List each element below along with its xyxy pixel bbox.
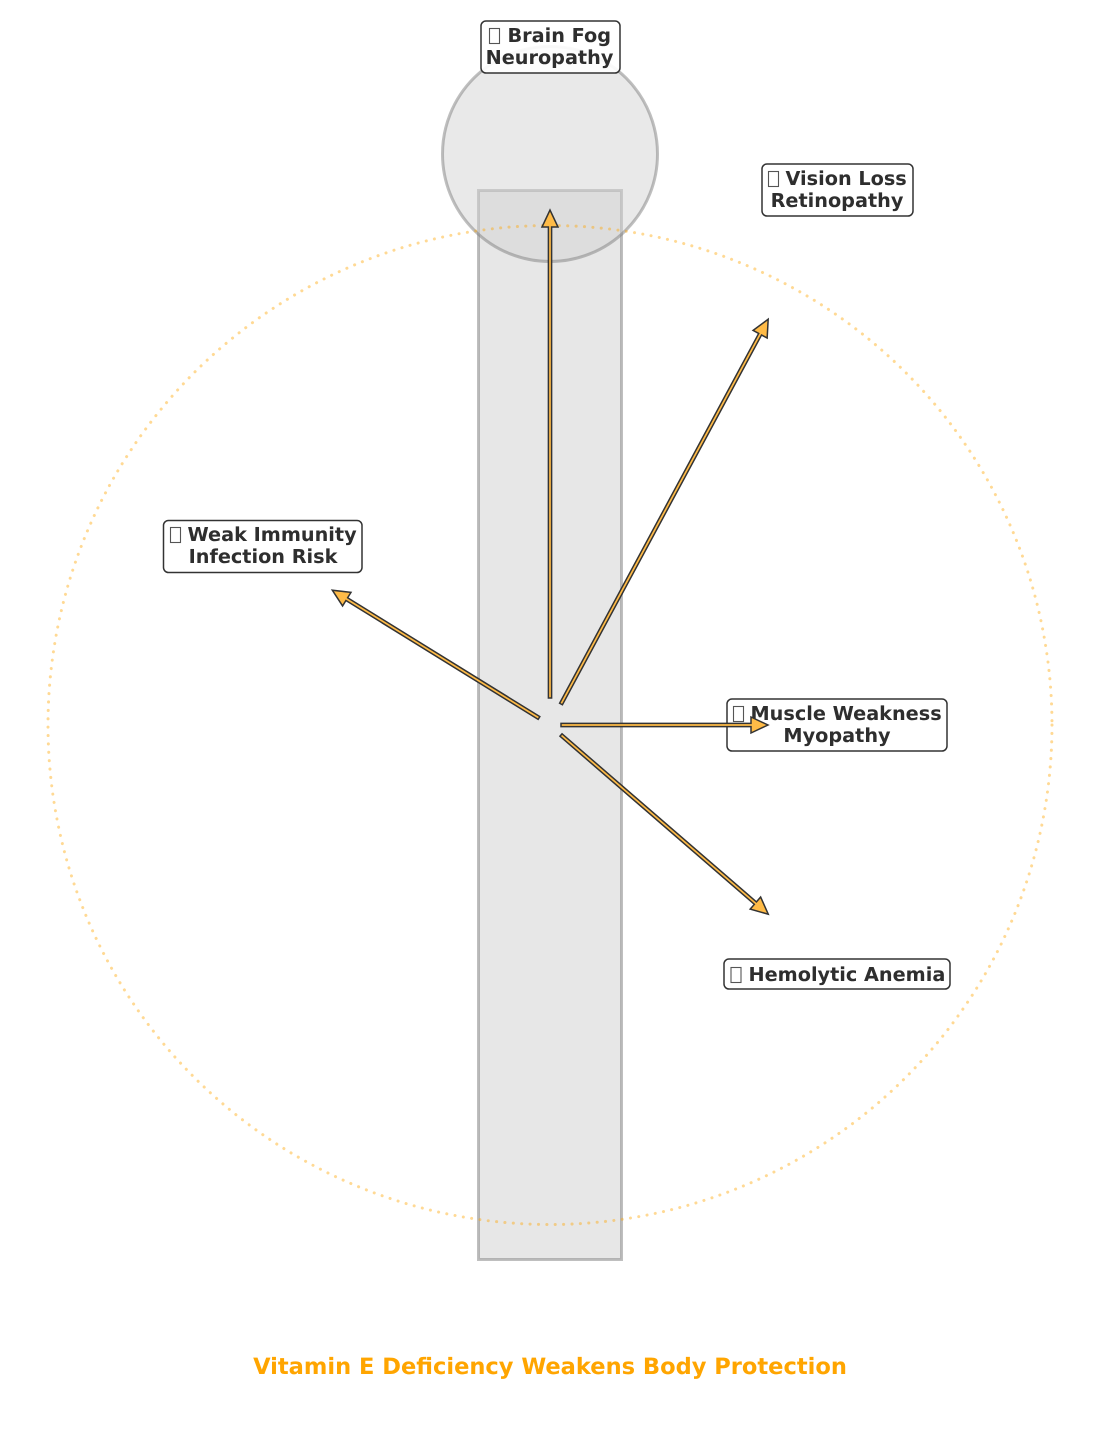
label: muscle weakness: Myopathy — [783, 724, 891, 747]
label: brain fog — [481, 21, 620, 73]
arrow: to brain — [542, 210, 558, 698]
title: Vitamin E Deficiency Weakens Body Protection — [253, 1354, 847, 1380]
label: vision loss — [762, 164, 913, 216]
label: muscle weakness — [727, 699, 947, 751]
label: weak immunity: Infection Risk — [189, 545, 339, 568]
body silhouette: head — [442, 46, 658, 262]
label: vision loss: Retinopathy — [771, 189, 904, 212]
protective shield ring — [48, 226, 1052, 1224]
label: brain fog: Neuropathy — [486, 46, 614, 69]
label: muscle weakness: Muscle Weakness — [750, 702, 942, 725]
label: vision loss: Vision Loss — [786, 167, 907, 190]
arrow: to muscles — [561, 717, 768, 733]
body silhouette: torso — [478, 190, 622, 1260]
arrow: to eyes — [554, 315, 775, 708]
arrow: to blood — [556, 729, 773, 920]
label: hemolytic anemia: Hemolytic Anemia — [748, 963, 945, 986]
label: hemolytic anemia — [724, 959, 950, 989]
label: brain fog: Brain Fog — [508, 24, 611, 47]
arrow: to immune system — [328, 583, 543, 725]
label: weak immunity: Weak Immunity — [188, 523, 357, 546]
label: weak immunity — [164, 520, 362, 572]
